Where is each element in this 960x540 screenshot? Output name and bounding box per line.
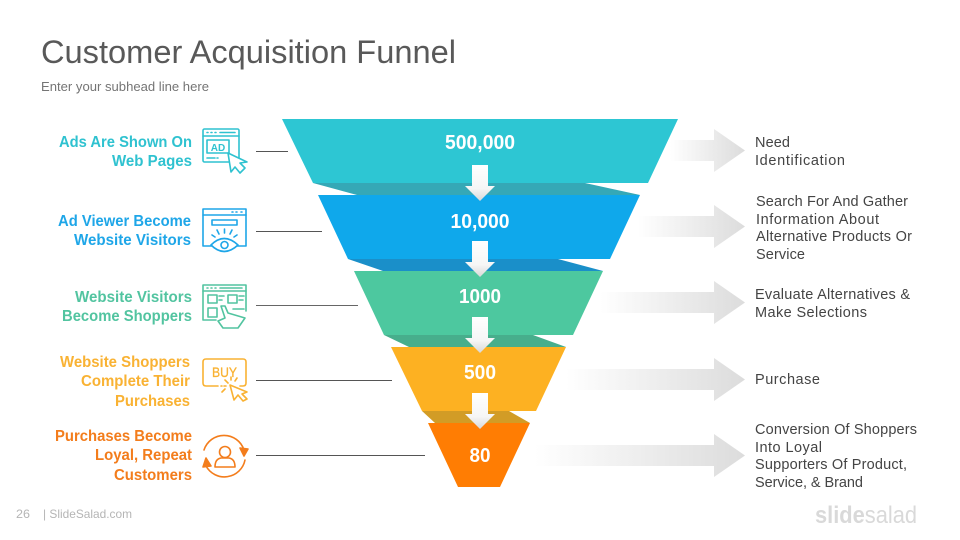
right text 5: Supporters Of Product, (755, 457, 907, 473)
footer logo: slidesalad (815, 502, 917, 529)
left label 1: Ads Are Shown On (59, 134, 192, 151)
right text 4: Purchase (755, 372, 820, 388)
connector line 5 (256, 455, 425, 456)
left label 2: Ad Viewer Become (58, 213, 191, 230)
left label 5: Customers (114, 467, 192, 484)
subhead: Enter your subhead line here (41, 80, 209, 94)
left label 5: Loyal, Repeat (95, 447, 193, 464)
right text 2: Search For And Gather (756, 194, 908, 210)
icon: ad browser with cursor: AD (211, 143, 225, 154)
right text 3 (755, 287, 910, 321)
arrow: right 1 (670, 129, 745, 172)
left label 3: Become Shoppers (62, 308, 192, 325)
right text 2 (756, 194, 912, 263)
arrow: right 4 (566, 358, 745, 401)
right text 3: Evaluate Alternatives & (755, 287, 910, 303)
arrow: right 3 (600, 281, 745, 324)
arrow: right 5 (535, 434, 745, 477)
icon: buy button with cursor: BUY (212, 364, 238, 380)
connector line 1 (256, 151, 288, 152)
funnel tier: 80 (428, 423, 530, 487)
funnel tier: 500,000: 500,000 (445, 132, 515, 154)
funnel connector bands (313, 183, 640, 423)
connector line 4 (256, 380, 392, 381)
funnel tier: 80: 80 (470, 445, 490, 467)
left label 2 (58, 213, 191, 249)
connector line 3 (256, 305, 358, 306)
title: Customer Acquisition Funnel (41, 34, 456, 70)
arrow: down 4 (465, 393, 495, 429)
left label 4 (60, 354, 190, 410)
funnel tier: 1000: 1000 (459, 286, 501, 308)
funnel tier: 1000 (354, 271, 603, 335)
icon: web page layout with hand (203, 285, 246, 328)
right text 2: Alternative Products Or (756, 229, 912, 245)
left label 4: Complete Their (81, 373, 190, 390)
icon: customer with circular arrows (203, 435, 248, 477)
footer page number: 26 (16, 507, 30, 521)
left label 4: Website Shoppers (60, 354, 190, 371)
arrow: down 1 (465, 165, 495, 201)
right text 2: Information About (756, 212, 879, 228)
left label 1 (59, 134, 192, 170)
left label 2: Website Visitors (74, 232, 191, 249)
icon: ad browser with cursor (203, 129, 247, 173)
icon: buy button with cursor (203, 359, 247, 401)
icon: browser with eye (203, 209, 246, 252)
left label 3: Website Visitors (75, 289, 192, 306)
left label 5: Purchases Become (55, 428, 192, 445)
left label 1: Web Pages (112, 153, 192, 170)
right text 5: Conversion Of Shoppers (755, 422, 917, 438)
arrow: down 2 (465, 241, 495, 277)
right text 1: Need (755, 135, 790, 151)
footer source: | SlideSalad.com (43, 507, 132, 521)
connector line 2 (256, 231, 322, 232)
left label 5 (55, 428, 193, 484)
funnel tier: 10,000 (318, 195, 640, 259)
right text 5: Service, & Brand (755, 475, 863, 491)
left label 3 (62, 289, 192, 325)
funnel tier: 500 (391, 347, 566, 411)
right text 5 (755, 422, 917, 491)
right text 3: Make Selections (755, 305, 867, 321)
right text 2: Service (756, 247, 805, 263)
right text 5: Into Loyal (755, 440, 822, 456)
right text 1 (755, 135, 845, 169)
funnel tier: 500: 500 (464, 362, 496, 384)
arrow: right 2 (638, 205, 745, 248)
funnel tier: 10,000: 10,000 (450, 211, 510, 233)
arrow: down 3 (465, 317, 495, 353)
funnel tier: 500,000 (282, 119, 678, 183)
funnel (282, 119, 678, 487)
left label 4: Purchases (115, 393, 190, 410)
right text 1: Identification (755, 153, 845, 169)
